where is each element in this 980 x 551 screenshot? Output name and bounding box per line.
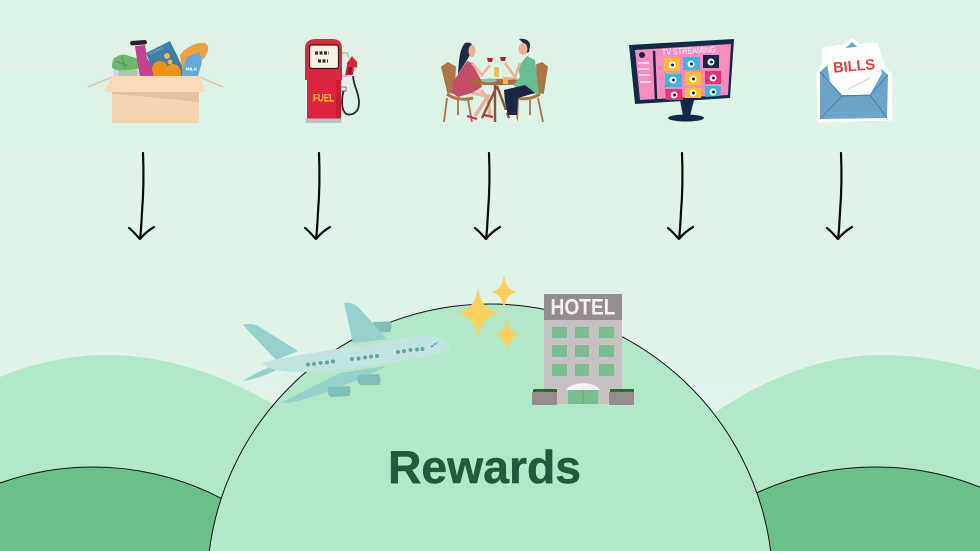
table	[468, 67, 526, 122]
centre rewards hill	[209, 304, 771, 551]
icon: groceries box: MILK	[186, 66, 198, 72]
right dark hill	[745, 467, 980, 551]
left chair	[442, 63, 473, 122]
right light hill	[700, 355, 980, 551]
icon: hotel: HOTEL	[550, 294, 616, 319]
arrow 2	[305, 153, 330, 239]
icon: TV streaming monitor: TV STREAMING	[662, 44, 716, 57]
arrow 4	[668, 153, 693, 239]
icon: fuel pump	[305, 39, 359, 123]
arrow 5	[827, 153, 852, 239]
icon: groceries box	[88, 40, 223, 123]
left light hill	[0, 355, 300, 551]
icon: fuel pump: FUEL	[313, 93, 334, 105]
heading: Rewards: Rewards	[388, 441, 581, 493]
icon: airplane	[243, 303, 450, 403]
right chair	[517, 63, 547, 122]
woman	[452, 43, 493, 119]
icon: sparkles	[460, 277, 518, 349]
arrow 1	[129, 153, 154, 239]
wine glasses	[487, 57, 506, 62]
icon: TV streaming monitor	[629, 39, 734, 122]
icon: bills envelope	[817, 39, 892, 122]
icon: groceries box: cookies	[148, 45, 165, 56]
arrow 3	[475, 153, 500, 239]
left dark hill	[0, 467, 235, 551]
icon: hotel	[532, 294, 634, 405]
icon: couple dining	[442, 39, 547, 123]
man	[498, 39, 539, 123]
icon: bills envelope: BILLS	[832, 56, 876, 77]
